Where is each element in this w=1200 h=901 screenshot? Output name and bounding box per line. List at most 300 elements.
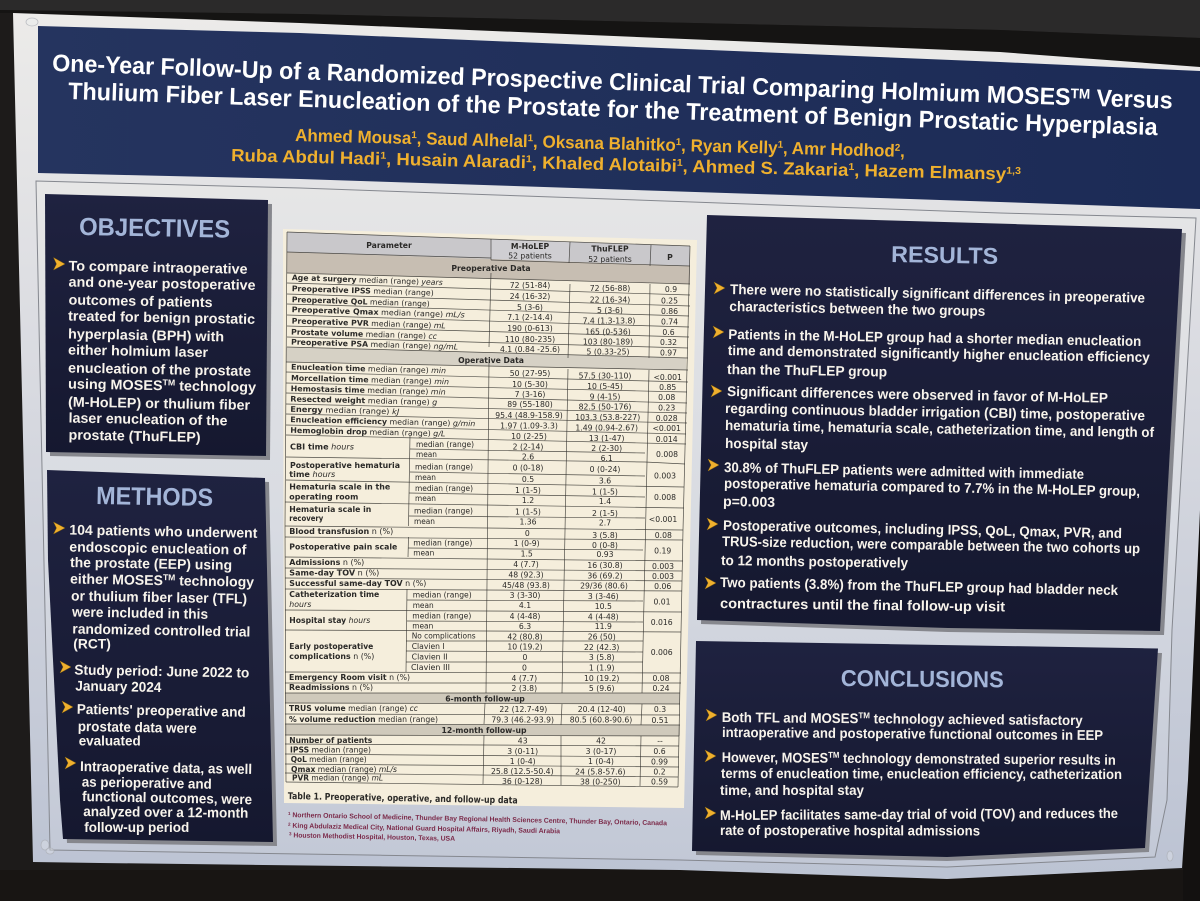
P value column: 0.08 <box>652 674 670 683</box>
P value column: 0.32 <box>660 338 677 347</box>
table row labels: Resected weight median (range) g <box>290 395 438 407</box>
methods bullet 1: endoscopic enucleation of <box>69 539 247 558</box>
title: TM <box>1070 85 1090 102</box>
table sub-row labels: mean <box>414 517 435 526</box>
P value column: 0.23 <box>658 404 675 412</box>
table row labels: Age at surgery median (range) years <box>292 273 443 287</box>
P value column: 0.86 <box>661 307 678 316</box>
methods bullet 3: evaluated <box>79 732 141 748</box>
ThuFLEP column values: 1.4 <box>599 497 611 506</box>
M-HoLEP column values: 3 (3-30) <box>510 591 540 600</box>
methods bullet 4: analyzed over a 12-month <box>83 803 248 821</box>
methods bullet 2 <box>60 661 250 695</box>
table row labels: Early postoperative <box>289 642 373 651</box>
band titles: 12-month follow-up <box>442 726 527 735</box>
ThuFLEP column values: 5 (9.6) <box>589 684 614 693</box>
conclusion 3: M-HoLEP facilitates same-day trial of void (TOV) and reduces the <box>720 805 1118 823</box>
M-HoLEP column values: 89 (55-180) <box>507 400 553 409</box>
M-HoLEP column values: 0 <box>525 529 530 538</box>
authors <box>231 125 1022 184</box>
ThuFLEP column values: 1.49 (0.94-2.67) <box>575 424 638 432</box>
objectives text: laser enucleation of the <box>68 410 228 428</box>
result 4: p=0.003 <box>723 493 775 510</box>
P value column: <0.001 <box>653 373 682 382</box>
M-HoLEP column values: 3 (0-11) <box>507 747 538 756</box>
authors: Ruba Abdul Hadi <box>231 145 372 168</box>
P value column: 0.003 <box>654 472 676 480</box>
result 2 <box>713 326 1150 380</box>
authors: , Hazem Elmansy <box>854 160 1007 184</box>
table row labels: Readmissions n (%) <box>289 683 373 692</box>
table sub-row labels: mean <box>416 450 437 459</box>
M-HoLEP column values: 4 (7.7) <box>512 674 537 683</box>
result 6 <box>705 574 1118 614</box>
ThuFLEP column values: 7.4 (1.3-13.8) <box>583 316 635 326</box>
M-HoLEP column values: 43 <box>518 736 528 746</box>
P value column: 0.6 <box>653 747 666 756</box>
band titles: Operative Data <box>458 356 524 365</box>
M-HoLEP column values: 7.1 (2-14.4) <box>507 313 553 322</box>
table row labels: Enucleation efficiency median (range) g/min <box>290 415 476 428</box>
table sub-row labels: mean <box>415 473 436 482</box>
table row labels: Hospital stay hours <box>289 616 370 625</box>
table header <box>287 232 690 266</box>
M-HoLEP column values: 1 (0-9) <box>514 539 540 548</box>
ThuFLEP column values: 20.4 (12-40) <box>578 705 626 714</box>
table row labels: Hematuria scale in the <box>289 482 390 492</box>
M-HoLEP column values: 1 (0-4) <box>510 757 536 766</box>
P value column <box>649 285 682 786</box>
ThuFLEP column values: 0 (0-8) <box>592 541 618 550</box>
table row labels: operating room <box>289 492 358 502</box>
objectives text <box>68 258 256 445</box>
table row labels: Admissions n (%) <box>289 558 364 567</box>
M-HoLEP column values: 0 <box>522 664 527 672</box>
table row labels: Successful same-day TOV n (%) <box>289 579 426 588</box>
M-HoLEP column values: 42 (80.8) <box>507 632 543 642</box>
table row labels: Energy median (range) kJ <box>290 405 400 416</box>
panel: results <box>697 215 1186 635</box>
result 4: 30.8% of ThuFLEP patients were admitted with immediate <box>724 459 1084 482</box>
result 5: Postoperative outcomes, including IPSS, QoL, Qmax, PVR, and <box>723 517 1122 541</box>
table sub-row labels: Clavien III <box>411 663 450 672</box>
table row labels: Blood transfusion n (%) <box>289 527 393 536</box>
affiliations: Houston Methodist Hospital, Houston, Texas, USA <box>291 832 455 843</box>
methods bullet 2: January 2024 <box>75 678 162 695</box>
M-HoLEP column values: 1.36 <box>519 518 537 526</box>
table row labels: Preoperative IPSS median (range) <box>292 284 434 298</box>
authors: 1 <box>528 133 534 144</box>
M-HoLEP column values: 50 (27-95) <box>510 369 550 378</box>
table sub-row labels: mean <box>412 622 433 630</box>
P value column: 0.3 <box>654 705 666 714</box>
table sub-row labels: Clavien II <box>412 652 448 662</box>
result 2: Patients in the M-HoLEP group had a shorter median enucleation <box>728 326 1141 349</box>
objectives text: prostate (ThuFLEP) <box>68 427 201 445</box>
table header: 52 patients <box>588 255 632 264</box>
table header: P <box>667 253 673 262</box>
icon: arrow bullet <box>54 258 65 270</box>
conclusion 1: intraoperative and postoperative functional outcomes in EEP <box>722 724 1103 743</box>
ThuFLEP column values: 10 (19.2) <box>584 674 619 683</box>
ThuFLEP column values: 9 (4-15) <box>590 392 620 402</box>
heading: results: RESULTS <box>891 241 998 269</box>
table row labels: Hematuria scale in <box>289 505 371 514</box>
authors: 1 <box>676 137 682 148</box>
result 4: postoperative hematuria compared to 7.7% in the M-HoLEP group, <box>724 475 1140 499</box>
affiliations: 2 <box>288 822 291 827</box>
ThuFLEP column values: 3 (5.8) <box>592 531 618 540</box>
P value column: 0.25 <box>661 296 678 306</box>
P value column: 0.008 <box>656 450 678 459</box>
ThuFLEP column values: 16 (30.8) <box>587 561 623 570</box>
table row labels: Postoperative pain scale <box>289 542 397 552</box>
ThuFLEP column values: 13 (1-47) <box>589 434 625 443</box>
authors: , Husain Alaradi <box>386 149 526 172</box>
affiliations <box>288 811 667 843</box>
authors: , Amr Hodhod <box>783 138 895 161</box>
M-HoLEP column values: 10 (2-25) <box>511 432 547 441</box>
P value column: 0.003 <box>652 562 674 571</box>
M-HoLEP column values: 7 (3-16) <box>515 390 545 399</box>
ThuFLEP column values: 10.5 <box>595 602 612 611</box>
conclusion 2: terms of enucleation time, enucleation efficiency, catheterization <box>721 765 1122 782</box>
ThuFLEP column values: 2 (1-5) <box>592 509 618 518</box>
authors: , Ahmed S. Zakaria <box>682 156 849 180</box>
ThuFLEP column values: 1 (1-5) <box>592 488 618 496</box>
methods bullet 1: were included in this <box>71 603 208 622</box>
methods bullet 3 <box>62 701 246 748</box>
table sub-row labels: median (range) <box>415 462 473 472</box>
table sub-row labels: median (range) <box>416 440 474 449</box>
title <box>52 50 1173 141</box>
table row labels: Catheterization time <box>289 590 379 599</box>
ThuFLEP column values: 0.93 <box>596 550 614 559</box>
M-HoLEP column values: 10 (5-30) <box>512 380 548 389</box>
objectives text: TM <box>163 377 175 387</box>
authors: , <box>900 141 905 161</box>
conclusion 2: However, MOSES <box>722 749 838 766</box>
result 3: regarding continuous bladder irrigation (CBI) time, postoperative <box>725 400 1145 423</box>
conclusion 1: TM <box>858 710 870 720</box>
authors: 1,3 <box>1006 166 1022 177</box>
result 6: Two patients (3.8%) from the ThuFLEP group had bladder neck <box>720 574 1118 598</box>
table row labels: Same-day TOV n (%) <box>289 568 379 578</box>
authors: Ahmed Mousa <box>295 125 415 148</box>
ThuFLEP column values: 22 (42.3) <box>584 643 619 652</box>
authors: 1 <box>848 162 855 173</box>
conclusion 1 <box>706 709 1103 743</box>
M-HoLEP column values: 72 (51-84) <box>510 281 550 290</box>
authors: 1 <box>778 140 784 151</box>
M-HoLEP column values: 25.8 (12.5-50.4) <box>491 767 554 776</box>
table row labels: Number of patients <box>289 736 373 745</box>
result 5: to 12 months postoperatively <box>721 552 908 571</box>
methods bullet 1: 104 patients who underwent <box>69 522 258 541</box>
ThuFLEP column values: 4 (4-48) <box>588 612 619 622</box>
table row labels: Emergency Room visit n (%) <box>289 673 410 682</box>
P value column: 0.9 <box>665 285 677 294</box>
P value column: 0.97 <box>660 348 677 358</box>
ThuFLEP column values: 3 (3-46) <box>588 592 619 601</box>
M-HoLEP column values: 2 (3.8) <box>512 684 537 693</box>
M-HoLEP column values: 6.3 <box>519 622 531 631</box>
ThuFLEP column values: 26 (50) <box>588 632 616 642</box>
table row labels: PVR median (range) mL <box>292 774 383 782</box>
ThuFLEP column values: 24 (5.8-57.6) <box>575 768 625 776</box>
P value column: 0.59 <box>651 778 668 786</box>
table sub-row labels <box>411 440 476 672</box>
P value column: 0.014 <box>656 435 678 444</box>
affiliations: Northern Ontario School of Medicine, Thunder Bay Regional Health Sciences Centre, Thunder Bay, Ontario, Canada <box>290 812 667 827</box>
content frame <box>36 181 1196 867</box>
ThuFLEP column values: 82.5 (50-176) <box>579 402 631 412</box>
result 1: There were no statistically significant differences in preoperative <box>730 281 1145 306</box>
P value column: 0.003 <box>652 572 674 581</box>
P value column: 0.008 <box>654 493 676 502</box>
M-HoLEP column values: 79.3 (46.2-93.9) <box>491 716 554 724</box>
objectives text: using MOSES <box>68 376 160 393</box>
ThuFLEP column values: 11.9 <box>595 622 612 631</box>
ThuFLEP column values: 2.7 <box>599 518 611 528</box>
ThuFLEP column values <box>570 284 640 786</box>
ThuFLEP column values: 5 (3-6) <box>597 306 623 315</box>
heading: methods: METHODS <box>96 482 213 512</box>
conclusion 3 <box>705 805 1118 838</box>
panel: objectives <box>45 194 272 460</box>
heading: conclusions: CONCLUSIONS <box>841 665 1004 692</box>
table sub-row labels: Clavien I <box>412 642 445 651</box>
table row labels: TRUS volume median (range) cc <box>289 704 419 713</box>
ThuFLEP column values: 22 (16-34) <box>590 296 630 304</box>
M-HoLEP column values: 2 (2-14) <box>513 442 543 452</box>
M-HoLEP column values: 110 (80-235) <box>505 335 555 344</box>
section bands <box>285 252 690 736</box>
ThuFLEP column values: 36 (69.2) <box>587 572 623 580</box>
result 3: hospital stay <box>725 435 808 452</box>
P value column: 0.19 <box>654 546 671 556</box>
ThuFLEP column values: 0 (0-24) <box>590 465 620 474</box>
ThuFLEP column values: 3 (5.8) <box>589 653 614 662</box>
band titles: Preoperative Data <box>451 264 531 273</box>
objectives text: either holmium laser <box>68 342 209 360</box>
table row labels: IPSS median (range) <box>290 746 371 754</box>
M-HoLEP column values: 1 (1-5) <box>515 486 541 495</box>
P value column: 0.99 <box>651 758 668 766</box>
M-HoLEP column values: 10 (19.2) <box>507 642 543 652</box>
methods bullet 1: TM <box>163 572 175 582</box>
objectives text: outcomes of patients <box>68 292 213 310</box>
conclusion 2: time, and hospital stay <box>720 782 864 798</box>
objectives text: hyperplasia (BPH) with <box>68 326 224 344</box>
result 2: than the ThuFLEP group <box>727 361 887 380</box>
result 4 <box>708 459 1140 510</box>
band titles: 6-month follow-up <box>445 694 525 704</box>
ThuFLEP column values: 1 (0-4) <box>588 757 614 766</box>
table row labels: Postoperative hematuria <box>290 461 400 470</box>
authors: , Ryan Kelly <box>681 135 778 158</box>
title: Versus <box>1090 85 1173 115</box>
methods bullet 4: Intraoperative data, as well <box>80 758 252 777</box>
ThuFLEP column values: 80.5 (60.8-90.6) <box>570 716 632 724</box>
conclusion 2: technology demonstrated superior results in <box>839 750 1116 768</box>
authors: , Oksana Blahitko <box>533 131 676 155</box>
table row labels: time hours <box>289 470 335 479</box>
table row labels: QoL median (range) <box>291 755 367 764</box>
M-HoLEP column values: 22 (12.7-49) <box>499 705 547 714</box>
table card <box>283 229 697 808</box>
P value column: 0.74 <box>661 318 678 326</box>
M-HoLEP column values: 5 (3-6) <box>517 303 543 312</box>
P value column: 0.6 <box>662 328 675 337</box>
methods bullet 4: follow-up period <box>84 819 189 835</box>
table header: M-HoLEP <box>511 242 550 251</box>
ThuFLEP column values: 38 (0-250) <box>580 778 621 786</box>
table row labels: Preoperative Qmax median (range) mL/s <box>292 305 465 320</box>
authors: , Saud Alhelal <box>417 128 528 151</box>
title: One-Year Follow-Up of a Randomized Prospective Clinical Trial Comparing Holmium MOSES <box>52 50 1106 112</box>
M-HoLEP column values: 0 <box>523 653 528 662</box>
ThuFLEP column values: 42 <box>596 736 606 746</box>
panel: conclusions <box>692 641 1162 861</box>
authors: 2 <box>895 143 901 154</box>
ThuFLEP column values: 72 (56-88) <box>590 284 630 293</box>
M-HoLEP column values: 2.6 <box>522 452 534 462</box>
objectives text: and one-year postoperative <box>68 274 256 293</box>
M-HoLEP column values: 48 (92.3) <box>508 570 544 580</box>
M-HoLEP column values: 1.2 <box>522 496 534 505</box>
result 1: characteristics between the two groups <box>729 298 986 319</box>
table sub-row labels: median (range) <box>412 612 471 620</box>
heading: objectives: OBJECTIVES <box>79 213 230 244</box>
table header: ThuFLEP <box>591 244 629 254</box>
authors: 1 <box>411 130 417 141</box>
table row labels: hours <box>289 600 311 609</box>
M-HoLEP column values: 190 (0-613) <box>507 324 553 333</box>
objectives text: (M-HoLEP) or thulium fiber <box>68 394 251 413</box>
table row labels: recovery <box>289 514 323 523</box>
panel: methods <box>47 470 277 846</box>
table sub-row labels: mean <box>413 601 434 610</box>
ThuFLEP column values: 5 (0.33-25) <box>586 348 630 356</box>
P value column: <0.001 <box>649 515 677 524</box>
band titles <box>442 264 531 735</box>
table row labels: Hemoglobin drop median (range) g/L <box>290 426 445 438</box>
M-HoLEP column values: 4 (7.7) <box>513 560 539 569</box>
objectives text: enucleation of the prostate <box>68 360 251 379</box>
P value column: 0.51 <box>651 716 669 725</box>
table row labels: Qmax median (range) mL/s <box>291 765 397 774</box>
methods bullet 1 <box>54 522 258 652</box>
methods bullet 4: as perioperative and <box>82 774 212 792</box>
authors: 1 <box>380 151 387 162</box>
methods bullet 1: (RCT) <box>73 636 111 652</box>
M-HoLEP column values: 45/48 (93.8) <box>502 581 550 590</box>
conclusion 1: technology achieved satisfactory <box>870 710 1083 728</box>
methods bullet 1: either MOSES <box>70 571 163 588</box>
objectives text: technology <box>175 377 256 395</box>
affiliations: 3 <box>289 831 292 836</box>
ThuFLEP column values: 29/36 (80.6) <box>580 582 628 590</box>
table row labels: % volume reduction median (range) <box>289 715 438 724</box>
result 2: time and demonstrated significantly higher enucleation efficiency <box>728 342 1150 365</box>
ThuFLEP column values: 165 (0-536) <box>585 328 631 336</box>
methods bullet 3: prostate data were <box>78 718 197 736</box>
ThuFLEP column values: 2 (2-30) <box>591 444 622 453</box>
conclusion 1: Both TFL and MOSES <box>722 709 866 726</box>
table sub-row labels: No complications <box>412 632 476 640</box>
table row labels <box>289 273 476 782</box>
conclusion 3: rate of postoperative hospital admissions <box>720 822 980 838</box>
table sub-row labels: mean <box>415 494 436 503</box>
P value column: -- <box>657 736 663 746</box>
methods bullet 4 <box>65 757 252 835</box>
methods bullet 1: randomized controlled trial <box>72 621 250 640</box>
M-HoLEP column values: 4.1 (0.84 -25.6) <box>500 345 560 354</box>
P value column: 0.028 <box>656 414 678 423</box>
P value column: 0.2 <box>653 768 666 776</box>
M-HoLEP column values: 1.97 (1.09-3.3) <box>500 422 558 430</box>
P value column: 0.85 <box>659 383 676 392</box>
methods bullet 1: or thulium fiber laser (TFL) <box>71 588 247 607</box>
table row labels: Preoperative QoL median (range) <box>292 295 430 308</box>
result 1 <box>714 281 1145 319</box>
result 3 <box>711 383 1154 452</box>
methods bullet 1: the prostate (EEP) using <box>70 554 232 573</box>
table header: 52 patients <box>508 252 552 260</box>
table header: Parameter <box>366 241 412 250</box>
M-HoLEP column values: 95.4 (48.9-158.9) <box>495 411 563 420</box>
P value column: 0.24 <box>652 684 670 693</box>
conclusion 2 <box>705 749 1122 798</box>
P value column: 0.08 <box>658 393 675 402</box>
table sub-row labels: median (range) <box>413 538 472 548</box>
table row labels: Prostate volume median (range) cc <box>291 328 438 341</box>
M-HoLEP column values: 24 (16-32) <box>510 292 550 301</box>
result 6: contractures until the final follow-up visit <box>720 595 1005 614</box>
methods bullet 4: functional outcomes, were <box>82 788 252 807</box>
P value column: 0.006 <box>651 648 673 657</box>
objectives text: To compare intraoperative <box>68 258 248 277</box>
table row labels: CBI time hours <box>290 442 354 452</box>
table sub-row labels: mean <box>413 548 434 558</box>
table sub-row labels: median (range) <box>413 590 472 600</box>
M-HoLEP column values: 0 (0-18) <box>513 464 543 472</box>
table row labels: Preoperative PVR median (range) mL <box>292 317 446 330</box>
ThuFLEP column values: 103 (80-189) <box>583 338 633 346</box>
table row labels: Preoperative PSA median (range) ng/mL <box>291 338 458 351</box>
ThuFLEP column values: 3.6 <box>599 476 611 486</box>
ThuFLEP column values: 6.1 <box>601 454 613 463</box>
ThuFLEP column values: 1 (1.9) <box>589 664 614 672</box>
result 5 <box>707 517 1140 571</box>
table sub-row labels: median (range) <box>414 506 473 516</box>
table row labels: Enucleation time median (range) min <box>291 363 446 375</box>
P value column: <0.001 <box>652 424 681 433</box>
M-HoLEP column values: 4 (4-48) <box>510 612 540 621</box>
header banner <box>38 26 1200 209</box>
table row labels: Hemostasis time median (range) min <box>291 384 446 397</box>
result 5: TRUS-size reduction, were comparable between the two cohorts up <box>722 533 1140 556</box>
conclusion 2: TM <box>828 750 839 760</box>
result 3: Significant differences were observed in favor of M-HoLEP <box>727 383 1108 406</box>
ThuFLEP column values: 57.5 (30-110) <box>579 372 631 380</box>
ThuFLEP column values: 10 (5-45) <box>587 382 623 391</box>
M-HoLEP column values <box>491 281 563 786</box>
table sub-row labels: median (range) <box>415 484 473 493</box>
M-HoLEP column values: 4.1 <box>519 601 531 610</box>
P value column: 0.08 <box>655 531 672 540</box>
